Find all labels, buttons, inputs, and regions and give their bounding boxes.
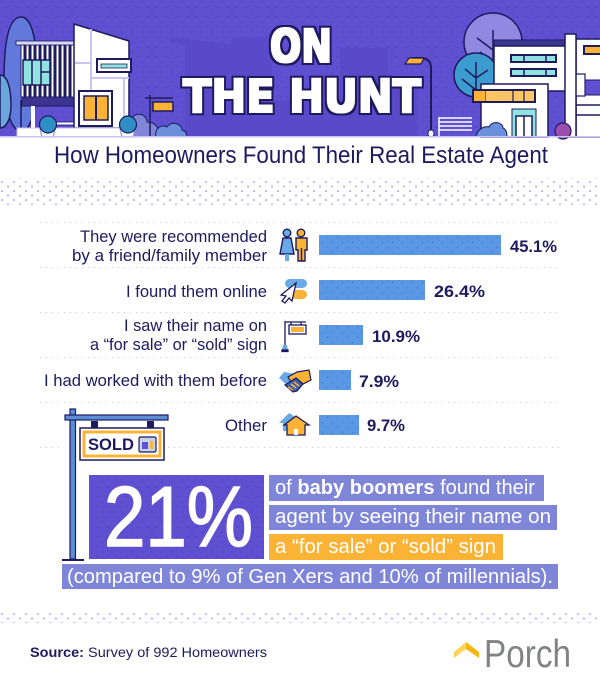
right modern building [473, 34, 600, 139]
right trees [454, 13, 522, 98]
subtitle: How Homeowners Found Their Real Estate Agent [54, 142, 548, 169]
icon: handshake [279, 370, 311, 392]
icon: sign post [282, 321, 306, 352]
row: other: Other [225, 416, 267, 435]
callout text: (compared to 9% of Gen Xers and 10% of millennials). [67, 565, 553, 588]
row: recommended: 45.1% [510, 237, 557, 256]
callout: 21% [62, 470, 558, 589]
bar chart [44, 227, 557, 435]
row: other [225, 413, 405, 435]
row: worked before [44, 370, 399, 392]
row: sign: a “for sale” or “sold” sign [90, 335, 267, 354]
row: online: I found them online [126, 282, 267, 301]
left tall tree [0, 17, 37, 131]
title: THE HUNT [183, 70, 421, 123]
street lamp and bench [405, 58, 472, 137]
bottom edge of header [0, 136, 600, 138]
callout text: of baby boomers found their [275, 476, 535, 499]
icon: sold sign badge [139, 437, 156, 452]
sold sign: SOLD [88, 435, 134, 454]
row: sign: 10.9% [372, 327, 420, 346]
porch logo [454, 633, 571, 676]
callout text: agent by seeing their name on [275, 505, 551, 528]
row: recommended: by a friend/family member [72, 246, 267, 265]
background skyline silhouette [170, 37, 418, 137]
row: worked before: 7.9% [359, 372, 399, 391]
source: Source: Survey of 992 Homeowners [30, 645, 267, 660]
row: recommended: They were recommended [80, 227, 267, 246]
dotted band bottom [0, 613, 600, 623]
row: sign: I saw their name on [124, 316, 267, 335]
row: online: 26.4% [434, 282, 485, 301]
header banner [0, 0, 600, 139]
row: worked before: I had worked with them before [44, 371, 267, 390]
row: other: 9.7% [367, 416, 405, 435]
bushes and hanging sign [130, 95, 187, 137]
icon: couple [280, 229, 307, 261]
row: recommended [72, 227, 557, 265]
porch logo: Porch [484, 633, 571, 676]
title: ON [270, 20, 332, 73]
left house [16, 24, 131, 137]
callout text: a “for sale” or “sold” sign [275, 535, 496, 558]
planters [40, 116, 136, 137]
title [183, 20, 421, 123]
sold sign [62, 409, 168, 561]
row dividers [40, 222, 560, 448]
row: online [126, 279, 485, 303]
icon: houses [279, 413, 309, 435]
callout text [62, 475, 558, 589]
stat box: 21% [104, 470, 253, 565]
row: sign [90, 316, 420, 354]
icon: cursor [281, 279, 307, 303]
dotted band top [0, 178, 600, 205]
